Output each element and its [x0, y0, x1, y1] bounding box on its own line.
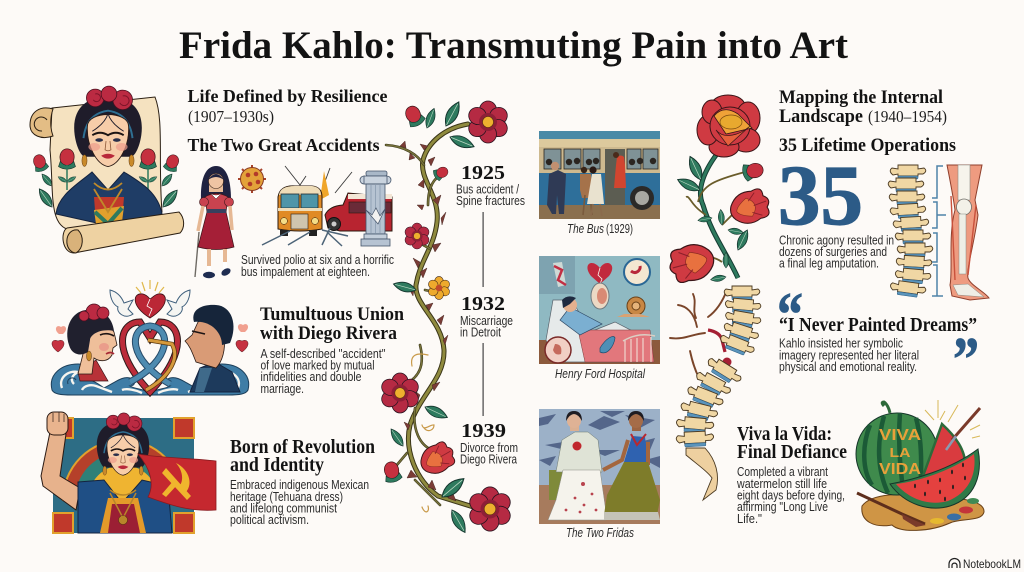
heading: Mapping the Internal Landscape: (1940–1954) [868, 107, 947, 126]
heading: Tumultuous Union with Diego Rivera [260, 305, 405, 344]
illustration: watermelon and palette [856, 400, 984, 530]
text: polio and bus accident [241, 253, 394, 279]
text: watermelon still life: Completed a vibrant [737, 465, 828, 479]
timeline entry: 1932: in Detroit [460, 326, 501, 340]
heading: Born of Revolution and Identity [230, 437, 375, 476]
icon: closing quotation mark: ” [953, 326, 979, 394]
text: self-described accident: marriage. [260, 382, 304, 396]
illustration: girl with cane [195, 166, 234, 278]
illustration: watermelon and palette: LA [890, 445, 911, 460]
timeline entry: 1925: Bus accident / [456, 182, 519, 196]
text: watermelon still life: Life." [737, 512, 762, 526]
painting: Henry Ford Hospital [539, 256, 660, 364]
text: watermelon still life [736, 465, 845, 526]
text: chronic agony [779, 234, 894, 270]
heading: Born of Revolution and Identity: Born of Revolution [230, 437, 375, 458]
illustration: watermelon and palette: VIVA [879, 427, 922, 444]
text: watermelon still life: watermelon still life [736, 477, 827, 491]
heading: Mapping the Internal Landscape: Mapping the Internal [779, 87, 943, 108]
timeline entry: 1925: Spine fractures [456, 194, 525, 208]
timeline entry: 1925: 1925 [461, 162, 505, 184]
icon: polio virus [238, 165, 266, 193]
caption: The Bus: (1929) [606, 222, 633, 236]
heading: Mapping the Internal Landscape: Landscape [779, 106, 863, 127]
heading: 35 Lifetime Operations: 35 Lifetime Operations [779, 136, 956, 156]
text: indigenous heritage [230, 478, 369, 527]
heading: Life Defined by Resilience [188, 86, 388, 126]
text: symbolic imagery: imagery represented her literal [779, 348, 919, 362]
heading: Tumultuous Union with Diego Rivera: with Diego Rivera [260, 324, 397, 344]
illustration: leg anatomy [947, 165, 989, 300]
heading: Mapping the Internal Landscape [779, 87, 947, 127]
icon: blue bracket lines [932, 166, 946, 296]
heading: Viva la Vida [737, 424, 847, 463]
heading: The Two Great Accidents: The Two Great Accidents [188, 135, 380, 155]
caption: Henry Ford Hospital: Henry Ford Hospital [555, 367, 646, 381]
text: chronic agony: dozens of surgeries and [779, 245, 887, 259]
caption: The Bus: The Bus [567, 222, 604, 236]
text: indigenous heritage: political activism. [230, 513, 309, 527]
text: self-described accident [260, 347, 386, 396]
text: polio and bus accident: bus impalement at eighteen. [241, 265, 370, 279]
caption: The Two Fridas: The Two Fridas [566, 526, 634, 540]
heading: I Never Painted Dreams: “I Never Painted Dreams” [779, 315, 977, 336]
text: symbolic imagery [779, 336, 919, 374]
illustration: Frida and Diego knot [51, 280, 249, 395]
painting: The Bus [539, 131, 660, 219]
timeline entry: 1932 [460, 293, 513, 340]
timeline entry: 1939: Divorce from [460, 441, 518, 455]
heading: Viva la Vida: Viva la Vida: [737, 424, 832, 445]
text: self-described accident: infidelities and double [260, 370, 362, 384]
text: chronic agony: a final leg amputation. [779, 256, 879, 270]
heading: Viva la Vida: Final Defiance [737, 442, 847, 463]
text: self-described accident: A self-described "accident" [260, 347, 386, 361]
illustration: watermelon and palette: VIDA [879, 461, 921, 478]
text: watermelon still life: eight days before dying, [737, 488, 845, 502]
timeline entry: 1939: Diego Rivera [460, 452, 517, 466]
illustration: Frida portrait on scroll [30, 86, 184, 253]
heading: Life Defined by Resilience: Life Defined by Resilience [188, 86, 388, 106]
timeline entry: 1939: 1939 [461, 420, 506, 442]
timeline entry: 1932: Miscarriage [460, 314, 513, 328]
illustration: flowering stem and broken spine [666, 95, 774, 500]
heading: Tumultuous Union with Diego Rivera: Tumultuous Union [260, 305, 405, 325]
text: polio and bus accident: Survived polio at six and a horrific [241, 253, 394, 267]
timeline entry: 1925 [456, 162, 525, 208]
heading: Born of Revolution and Identity: and Identity [230, 455, 324, 476]
illustration: spine segment [888, 165, 933, 298]
illustration: bus collision [262, 166, 392, 246]
icon: opening quotation mark: “ [777, 281, 803, 349]
heading: Life Defined by Resilience: (1907–1930s) [188, 107, 274, 126]
text: chronic agony: Chronic agony resulted in [779, 234, 894, 248]
title: Frida Kahlo: Transmuting Pain into Art [179, 24, 848, 67]
painting: The Two Fridas [539, 409, 660, 524]
text: indigenous heritage: Embraced indigenous Mexican [230, 478, 369, 492]
big number: 35: 35 [778, 147, 863, 243]
timeline entry: 1939 [460, 420, 518, 466]
text: indigenous heritage: heritage (Tehuana dress) [230, 490, 343, 504]
illustration: thorny flowering vine [379, 99, 514, 535]
text: self-described accident: of love marked by mutual [260, 358, 374, 372]
timeline entry: 1932: 1932 [461, 293, 505, 315]
text: watermelon still life: affirming "Long Live [737, 500, 828, 514]
text: indigenous heritage: and lifelong communist [230, 502, 337, 516]
text: symbolic imagery: physical and emotional reality. [779, 360, 917, 374]
illustration: Frida with raised fist and flag [41, 412, 216, 533]
text: symbolic imagery: Kahlo insisted her symbolic [779, 336, 903, 350]
illustration: broken column [360, 171, 391, 246]
